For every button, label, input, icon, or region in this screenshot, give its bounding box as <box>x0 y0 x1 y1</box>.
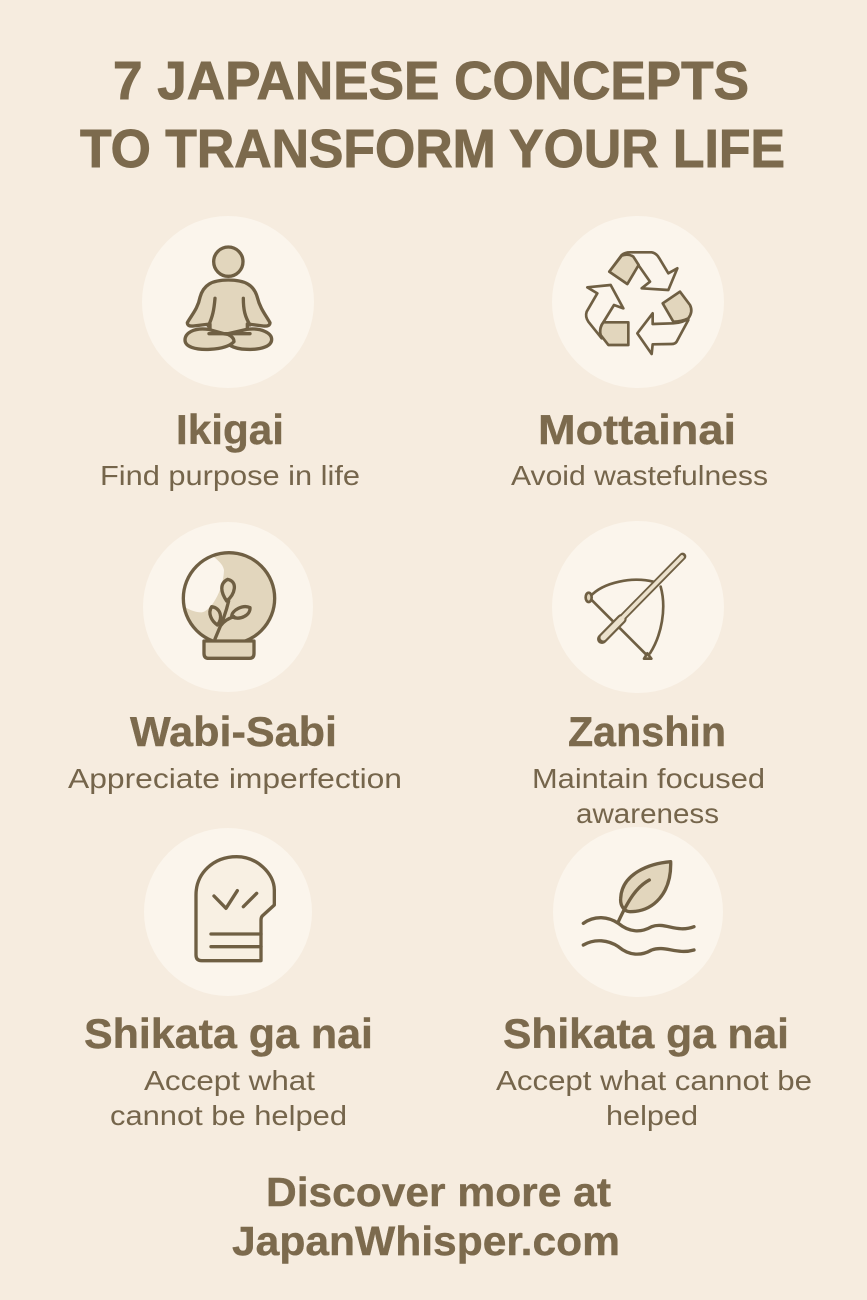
description: Shikata ga nai: Accept what cannot be <box>496 1065 812 1096</box>
panel: Wabi-Sabi <box>68 522 402 794</box>
concept name: Shikata ga nai: Shikata ga nai <box>84 1010 373 1057</box>
concept name: Mottainai: Mottainai <box>538 406 736 453</box>
title: TO TRANSFORM YOUR LIFE <box>80 119 785 179</box>
footer call to action: Discover more at <box>266 1169 611 1215</box>
panel: Ikigai <box>100 216 360 491</box>
description: Shikata ga nai: cannot be helped <box>110 1100 347 1131</box>
description: Shikata ga nai: Accept what <box>144 1065 315 1096</box>
description: Shikata ga nai: helped <box>606 1100 698 1131</box>
infographic canvas <box>68 61 811 1264</box>
description: Shikata ga nai <box>110 1065 347 1131</box>
footer call to action: JapanWhisper.com <box>232 1218 620 1264</box>
title <box>80 51 785 179</box>
icon: mitt with check marks <box>196 857 274 961</box>
footer call to action <box>232 1169 620 1264</box>
icon: meditating figure <box>185 247 272 349</box>
description: Shikata ga nai <box>496 1065 812 1131</box>
concept name: Ikigai: Ikigai <box>176 406 284 453</box>
panel: Zanshin <box>532 521 765 829</box>
panel: Shikata ga nai (left) <box>84 828 373 1131</box>
icon: leaf over waves <box>583 862 694 954</box>
description: Zanshin: awareness <box>576 798 719 829</box>
title: 7 JAPANESE CONCEPTS <box>113 51 749 111</box>
concept name: Shikata ga nai: Shikata ga nai <box>503 1010 789 1057</box>
description: Zanshin: Maintain focused <box>532 763 765 794</box>
panel: Mottainai <box>511 216 768 491</box>
description: Wabi-Sabi: Appreciate imperfection <box>68 763 402 794</box>
description: Mottainai: Avoid wastefulness <box>511 460 768 491</box>
description: Zanshin <box>532 763 765 829</box>
icon: bow and arrow <box>586 556 683 659</box>
icon: recycling arrows <box>586 252 691 354</box>
icon: plant in glass globe <box>180 553 275 658</box>
panel: Shikata ga nai (right) <box>496 827 812 1131</box>
description: Ikigai: Find purpose in life <box>100 460 360 491</box>
concept name: Zanshin: Zanshin <box>568 708 726 755</box>
concept name: Wabi-Sabi: Wabi-Sabi <box>130 708 337 755</box>
